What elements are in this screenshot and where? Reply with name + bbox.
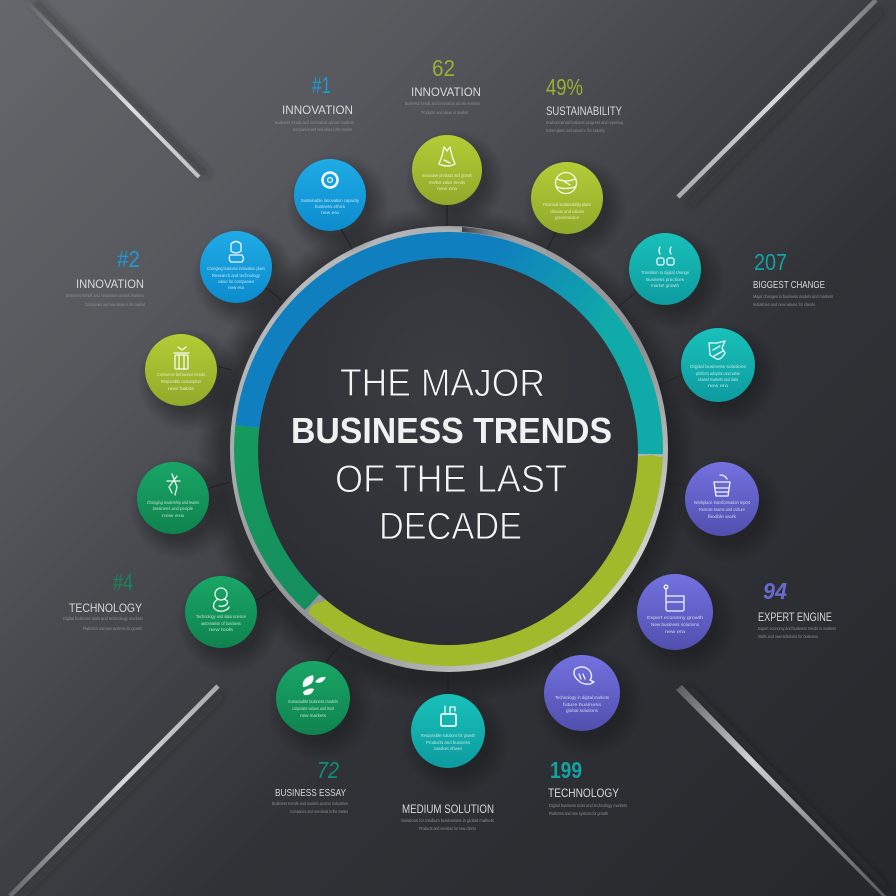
diagonal accent: bottom right <box>676 685 888 896</box>
circle: green leaves: new markets <box>300 713 327 718</box>
circle: teal cups <box>621 227 725 331</box>
circle: purple glass: Workplace transformation report <box>694 500 751 505</box>
label: 199 technology: 199 <box>550 757 582 783</box>
circle: green figure: Business and people <box>153 506 193 511</box>
circle: blue person: value for companies <box>218 279 255 284</box>
circle: lime bin: new habits <box>168 386 195 391</box>
circle: purple glass: Remote teams and culture <box>699 507 745 512</box>
label: 199 technology <box>548 757 628 816</box>
label: #1 innovation <box>275 72 355 132</box>
circle: lime bin <box>137 328 241 432</box>
title <box>291 362 612 548</box>
label: #1 innovation: INNOVATION <box>282 103 353 117</box>
icon: box <box>441 706 456 726</box>
circle: blue gear cluster <box>286 153 390 257</box>
icon: bag <box>439 147 455 166</box>
label: 94 expert engine: Skills and new solutions for business <box>758 634 819 639</box>
circle: purple device <box>628 567 738 677</box>
label: 62 innovation: Products and ideas in market <box>421 110 469 115</box>
label: #4 technology: Platforms and new systems for growth <box>83 626 142 631</box>
icon: leaves <box>303 675 326 695</box>
circle: teal chart shield: new era <box>708 383 729 388</box>
circle: lime globe: climate and values <box>550 209 585 214</box>
label: 72 business: Companies and new ideas in the market <box>290 809 349 814</box>
diagonal accent: bottom left <box>10 686 224 896</box>
circle: blue gear cluster: new era <box>321 210 339 215</box>
label: medium solution: MEDIUM SOLUTION <box>402 802 494 816</box>
circle: teal box <box>402 687 510 795</box>
label: #2 innovation <box>66 246 146 307</box>
label: #4 technology: #4 <box>113 569 133 595</box>
label: #1 innovation: #1 <box>312 72 331 98</box>
circle: blue person: Changing business innovation plans <box>207 266 266 271</box>
label: 207 biggest change: BIGGEST CHANGE <box>753 279 825 291</box>
circle: lime globe <box>523 156 627 260</box>
label: medium solution: Solutions for medium businesses in global markets <box>401 818 495 823</box>
circle: blue person: Research and technology <box>212 273 261 278</box>
diagonal accent: top right <box>678 0 882 205</box>
label: #4 technology <box>63 569 144 631</box>
circle: teal chart shield: shared markets and data <box>698 377 738 382</box>
diagonal accent: top left <box>25 0 208 177</box>
inner disc <box>258 258 638 645</box>
label: 49% sustainability: SUSTAINABILITY <box>546 104 622 118</box>
icon: glass <box>714 475 730 496</box>
icon: head with gear <box>574 667 594 684</box>
icon: container <box>174 347 189 369</box>
circle: green figure eight: automation of business <box>201 621 242 626</box>
icon: gear cluster <box>322 172 338 188</box>
circle: purple device: Expert economy growth <box>647 615 704 620</box>
label: 207 biggest change <box>753 249 834 307</box>
label: 49% sustainability: Environmental business progress and reporting <box>546 120 623 125</box>
circle: teal cups: Business practices <box>646 277 685 282</box>
label: 94 expert engine <box>758 578 837 639</box>
circle: lime bin: Responsible consumption <box>161 379 201 384</box>
label: 49% sustainability <box>546 74 623 133</box>
circle: lime bag <box>405 130 505 230</box>
label: 72 business: BUSINESS ESSAY <box>275 787 346 799</box>
label: 49% sustainability: Green plans and values in the industry <box>546 128 606 133</box>
circle: teal cups: market growth <box>651 283 679 288</box>
circle: green figure: Changing leadership and teams <box>147 500 200 505</box>
icon: person <box>229 242 244 262</box>
circle: purple glass <box>676 455 784 563</box>
bezel highlights <box>462 230 530 244</box>
circle: green figure eight <box>177 570 281 674</box>
label: 94 expert engine: 94 <box>763 578 787 604</box>
icon: globe <box>556 172 576 194</box>
label: #1 innovation: Business trends and innovation across markets <box>275 120 355 125</box>
connectors between circles and ring <box>209 204 686 694</box>
circle: teal chart shield: Digital business solutions <box>690 364 747 369</box>
label: #2 innovation: Business trends and innovation across markets <box>66 293 145 298</box>
label: 72 business: Business trends and models across industries <box>272 801 349 806</box>
title: DECADE <box>379 506 522 548</box>
label: medium solution: Products and services for new clients <box>419 826 477 831</box>
circle: green leaves: corporate values and trust <box>292 706 335 711</box>
circle: purple head: future business <box>563 702 602 707</box>
icon: knot <box>214 588 229 611</box>
icon: document with graph <box>709 341 725 359</box>
circle: purple head <box>535 648 645 758</box>
label: 72 business <box>272 757 349 814</box>
circle: lime bag: new era <box>437 186 458 191</box>
circle: teal box: Responsible solutions for growth <box>421 733 475 738</box>
silver bezel <box>230 226 668 672</box>
circle: blue person: new era <box>228 285 244 290</box>
circle: purple glass: flexible work <box>708 514 737 519</box>
label: #4 technology: TECHNOLOGY <box>69 601 142 615</box>
label: 49% sustainability: 49% <box>546 74 583 100</box>
circle: green figure <box>129 456 233 560</box>
label: 62 innovation: INNOVATION <box>411 85 481 99</box>
label: 94 expert engine: Expert economy and business trends in markets <box>758 626 837 631</box>
label: 199 technology: TECHNOLOGY <box>548 786 619 800</box>
label: #2 innovation: INNOVATION <box>76 277 144 291</box>
segment: blue to teal <box>235 232 663 454</box>
circle: green figure eight: new tools <box>209 627 234 632</box>
circle: teal cups: Transition to digital change <box>641 270 689 275</box>
icon: figure <box>167 474 180 495</box>
label: #2 innovation: Companies and new ideas in the market <box>85 302 146 307</box>
label: 72 business: 72 <box>317 757 339 783</box>
circle: purple device: new era <box>665 629 686 634</box>
circle: lime bin: Consumer behaviour trends <box>157 372 206 377</box>
label: 62 innovation: 62 <box>432 55 455 81</box>
circle: green leaves <box>267 654 375 762</box>
circle: teal chart shield <box>673 322 779 428</box>
icon: steaming cups <box>657 247 674 265</box>
circle: green figure: new era <box>162 513 185 518</box>
circle: blue gear cluster: business ethics <box>315 204 346 209</box>
ring shadow <box>196 206 696 706</box>
label: #1 innovation: Companies and new ideas in the market <box>293 127 353 132</box>
circle: lime bag: market value trends <box>429 180 466 185</box>
segment: lime <box>308 455 663 666</box>
circle: green leaves: Sustainable business models <box>288 699 339 704</box>
icon: device <box>664 585 684 611</box>
label: 62 innovation: Business trends and innovation across markets <box>405 101 481 106</box>
title: THE MAJOR <box>340 362 545 405</box>
title: BUSINESS TRENDS <box>291 410 612 451</box>
circle: teal chart shield: platform adoption and value <box>696 371 740 376</box>
circle: lime bag: Innovative products and growth <box>422 173 472 178</box>
label: medium solution <box>401 802 495 831</box>
central ring <box>204 214 682 692</box>
segment: green <box>234 425 320 610</box>
circle: green figure eight: Technology and data science <box>196 614 246 619</box>
label: 62 innovation <box>405 55 481 115</box>
label: 207 biggest change: Major changes in business models and markets <box>753 294 834 299</box>
circle: blue person <box>192 225 296 329</box>
label: 199 technology: Platforms and new systems for growth <box>549 811 608 816</box>
label: #2 innovation: #2 <box>117 246 140 272</box>
circle: purple device: New business solutions <box>651 622 700 627</box>
circle: lime globe: Financial sustainability plans <box>543 202 592 207</box>
circle: teal box: Products and business <box>426 740 471 745</box>
circle: lime globe: governance <box>555 215 579 220</box>
circle: purple head: Technology in digital markets <box>555 695 610 700</box>
circle: purple head: global solutions <box>566 708 599 713</box>
title: OF THE LAST <box>335 458 567 501</box>
circle: teal box: market share <box>434 746 462 751</box>
label: 94 expert engine: EXPERT ENGINE <box>758 610 832 624</box>
label: #4 technology: Digital business tools and technology markets <box>63 616 144 621</box>
circle: blue gear cluster: Sustainable innovation capacity <box>301 198 360 203</box>
label: 199 technology: Digital business tools and technology markets <box>549 803 628 808</box>
label: 207 biggest change: 207 <box>754 249 787 275</box>
label: 207 biggest change: Industries and new values for clients <box>753 302 816 307</box>
